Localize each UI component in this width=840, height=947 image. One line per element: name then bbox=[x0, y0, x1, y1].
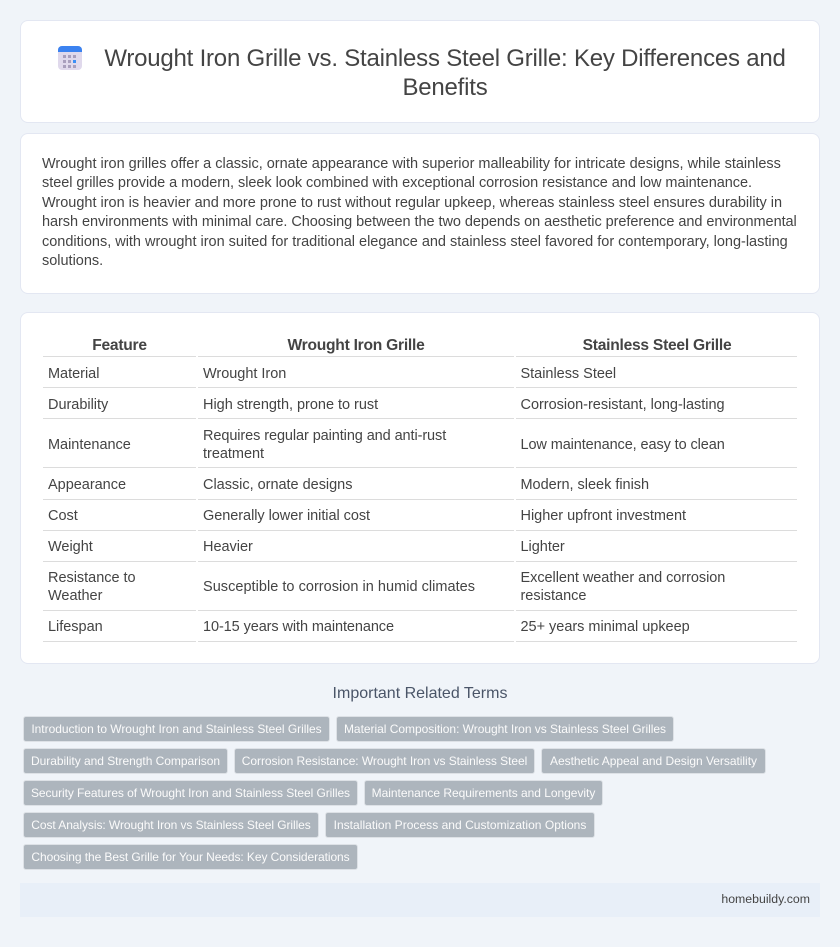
related terms tags: Aesthetic Appeal and Design Versatility bbox=[550, 754, 757, 768]
table rows: Resistance to bbox=[48, 570, 136, 586]
table header: Feature bbox=[92, 337, 147, 354]
table rows: Weight bbox=[48, 539, 93, 555]
table rows: Appearance bbox=[48, 477, 126, 493]
table rows: Stainless Steel bbox=[520, 366, 616, 382]
related terms tags: Corrosion Resistance: Wrought Iron vs Stainless Steel bbox=[242, 754, 527, 768]
table rows: Weather bbox=[48, 588, 102, 604]
table rows: Heavier bbox=[203, 539, 253, 555]
description text bbox=[42, 156, 797, 269]
title bbox=[104, 45, 786, 101]
table rows: Low maintenance, easy to clean bbox=[520, 437, 725, 453]
related terms tags: Maintenance Requirements and Longevity bbox=[372, 786, 595, 800]
related terms tags: Material Composition: Wrought Iron vs Stainless Steel Grilles bbox=[344, 722, 666, 736]
table rows bbox=[43, 356, 797, 642]
table rows: Modern, sleek finish bbox=[520, 477, 649, 493]
description text: harsh environments with minimal care. Choosing between the two depends on aesthetic preference and environmental bbox=[42, 214, 797, 230]
table rows: 25+ years minimal upkeep bbox=[520, 619, 690, 635]
description text: Wrought iron grilles offer a classic, ornate appearance with superior malleability for intricate designs, while stainless bbox=[42, 156, 781, 172]
related terms tags: Durability and Strength Comparison bbox=[31, 754, 220, 768]
table rows: Excellent weather and corrosion bbox=[520, 570, 725, 586]
table rows: 10-15 years with maintenance bbox=[203, 619, 394, 635]
table rows: Classic, ornate designs bbox=[203, 477, 352, 493]
related terms tags: Installation Process and Customization Options bbox=[334, 818, 586, 832]
panel: description bbox=[20, 133, 820, 294]
table rows: Generally lower initial cost bbox=[203, 508, 370, 524]
description text: conditions, with wrought iron suited for traditional elegance and stainless steel favored for contemporary, long-lasting bbox=[42, 234, 788, 250]
table rows: treatment bbox=[203, 446, 264, 462]
table rows: High strength, prone to rust bbox=[203, 397, 378, 413]
table rows: Lighter bbox=[520, 539, 565, 555]
table rows: Maintenance bbox=[48, 437, 131, 453]
description text: Wrought iron is heavier and more prone to rust without regular upkeep, whereas stainless steel ensures durability in bbox=[42, 195, 782, 211]
panel: comparison table bbox=[20, 312, 820, 664]
icon: calendar bbox=[58, 46, 82, 70]
table rows: Higher upfront investment bbox=[520, 508, 686, 524]
heading: important related terms: Important Related Terms bbox=[333, 685, 507, 702]
title: Benefits bbox=[402, 74, 488, 101]
table rows: Durability bbox=[48, 397, 108, 413]
table rows: resistance bbox=[520, 588, 586, 604]
footer bar bbox=[20, 883, 820, 917]
title: Wrought Iron Grille vs. Stainless Steel Grille: Key Differences and bbox=[104, 45, 786, 72]
description text: solutions. bbox=[42, 253, 103, 269]
table header bbox=[92, 337, 732, 354]
related terms tags: Cost Analysis: Wrought Iron vs Stainless Steel Grilles bbox=[31, 818, 311, 832]
footer site name: homebuildy.com bbox=[721, 892, 810, 906]
table rows: Lifespan bbox=[48, 619, 103, 635]
related terms tags bbox=[23, 716, 766, 870]
table rows: Material bbox=[48, 366, 99, 382]
table rows: Cost bbox=[48, 508, 78, 524]
table rows: Corrosion-resistant, long-lasting bbox=[520, 397, 725, 413]
related terms tags: Introduction to Wrought Iron and Stainless Steel Grilles bbox=[31, 722, 322, 736]
table header: Wrought Iron Grille bbox=[287, 337, 425, 354]
table rows: Susceptible to corrosion in humid climates bbox=[203, 579, 475, 595]
table rows: Requires regular painting and anti-rust bbox=[203, 428, 446, 444]
header card bbox=[20, 20, 820, 123]
description text: steel grilles provide a modern, sleek look combined with exceptional corrosion resistance and low maintenance. bbox=[42, 175, 752, 191]
related terms tags: Security Features of Wrought Iron and Stainless Steel Grilles bbox=[31, 786, 350, 800]
table rows: Wrought Iron bbox=[203, 366, 286, 382]
related terms tags: Choosing the Best Grille for Your Needs: Key Considerations bbox=[31, 850, 350, 864]
table header: Stainless Steel Grille bbox=[583, 337, 731, 354]
